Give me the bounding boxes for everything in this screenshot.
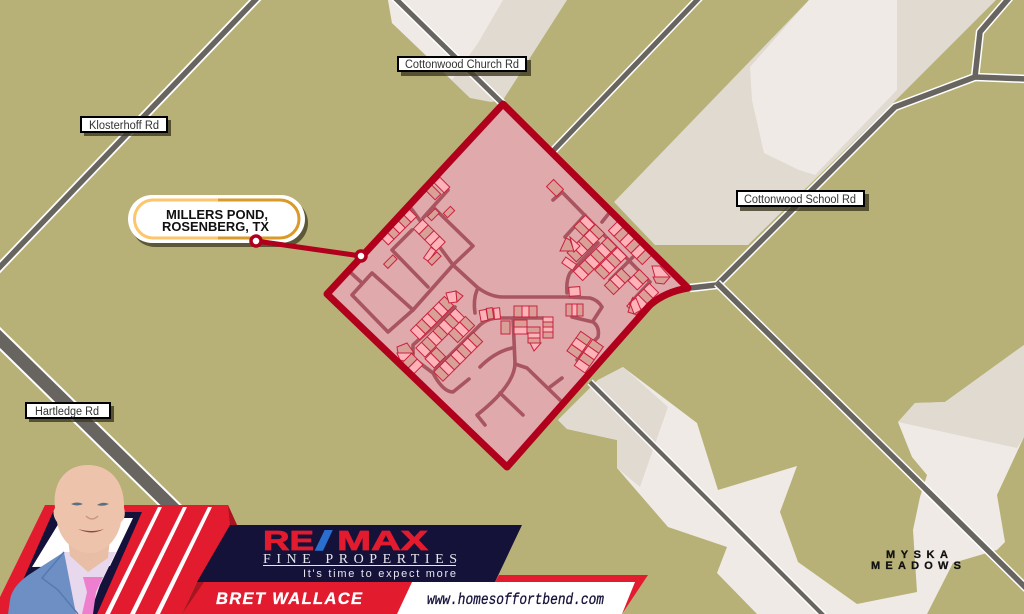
head (54, 465, 125, 553)
banner: white stripes (105, 507, 212, 614)
logo: RE/MAX Fine Properties (263, 525, 457, 580)
label: Klosterhoff Rd: Klosterhoff Rd (89, 120, 159, 132)
houses: bottom cluster (397, 291, 603, 381)
road: Cottonwood School Rd (690, 0, 1024, 288)
banner: navy logo panel (197, 525, 522, 582)
website: www.homesoffortbend.com (427, 591, 604, 609)
logo: RE/MAX Fine Properties: RE (263, 525, 314, 556)
houses: right cluster (547, 180, 670, 316)
label: Myska Meadows: MYSKA (886, 549, 948, 561)
suit (8, 552, 78, 614)
label: Klosterhoff Rd (81, 117, 171, 136)
banner: photo frame (8, 512, 142, 614)
road: Cottonwood Church Rd north (393, 0, 503, 104)
interior roads (350, 190, 650, 425)
label: Hartledge Rd (26, 403, 114, 422)
label: Cottonwood Church Rd (398, 57, 531, 76)
terrain: southeast floodplain (558, 345, 1024, 614)
road: Hartledge Rd (0, 329, 180, 515)
road: parallel road north east (552, 0, 700, 152)
logo: RE/MAX Fine Properties: FINE PROPERTIES (263, 552, 457, 567)
neck (68, 538, 110, 572)
tie (82, 577, 103, 614)
leader line and pins (251, 236, 366, 261)
banner: dark red fold (182, 505, 237, 614)
smile (78, 529, 104, 532)
callout: Millers Pond: ROSENBERG, TX (162, 220, 270, 234)
label: Cottonwood Church Rd: Cottonwood Church Rd (405, 59, 519, 71)
banner: white website panel (397, 582, 635, 614)
lapel (42, 552, 78, 614)
subdivision boundary: Millers Pond (327, 104, 688, 467)
agent portrait (8, 465, 125, 614)
houses: left cluster (379, 177, 455, 268)
banner: red photo panel (0, 505, 237, 614)
callout: Millers Pond: MILLERS POND, (166, 208, 268, 222)
terrain: central floodplain (614, 0, 996, 245)
label: Hartledge Rd: Hartledge Rd (35, 406, 99, 418)
shirt (64, 552, 116, 614)
road: south road (590, 382, 826, 614)
label: Cottonwood School Rd: Cottonwood School Rd (744, 194, 856, 206)
banner: photo backdrop (32, 518, 133, 567)
agent banner (0, 465, 648, 614)
road: Klosterhoff Rd (0, 0, 259, 271)
label: Myska Meadows (871, 549, 961, 572)
logo: RE/MAX Fine Properties: MAX (337, 525, 428, 556)
eyes (71, 502, 109, 506)
nose (86, 516, 98, 519)
banner: red footer strip (182, 575, 648, 614)
road: southeast road (717, 283, 1024, 592)
label: Cottonwood School Rd (737, 191, 869, 211)
logo: RE/MAX Fine Properties: / (314, 525, 334, 556)
label: Myska Meadows: MEADOWS (871, 560, 961, 572)
boundary outline (327, 104, 688, 467)
terrain: north floodplain (388, 0, 567, 102)
callout: Millers Pond (128, 195, 308, 247)
agent name: BRET WALLACE (216, 590, 363, 608)
logo: RE/MAX Fine Properties: It's time to expect more (303, 568, 456, 580)
